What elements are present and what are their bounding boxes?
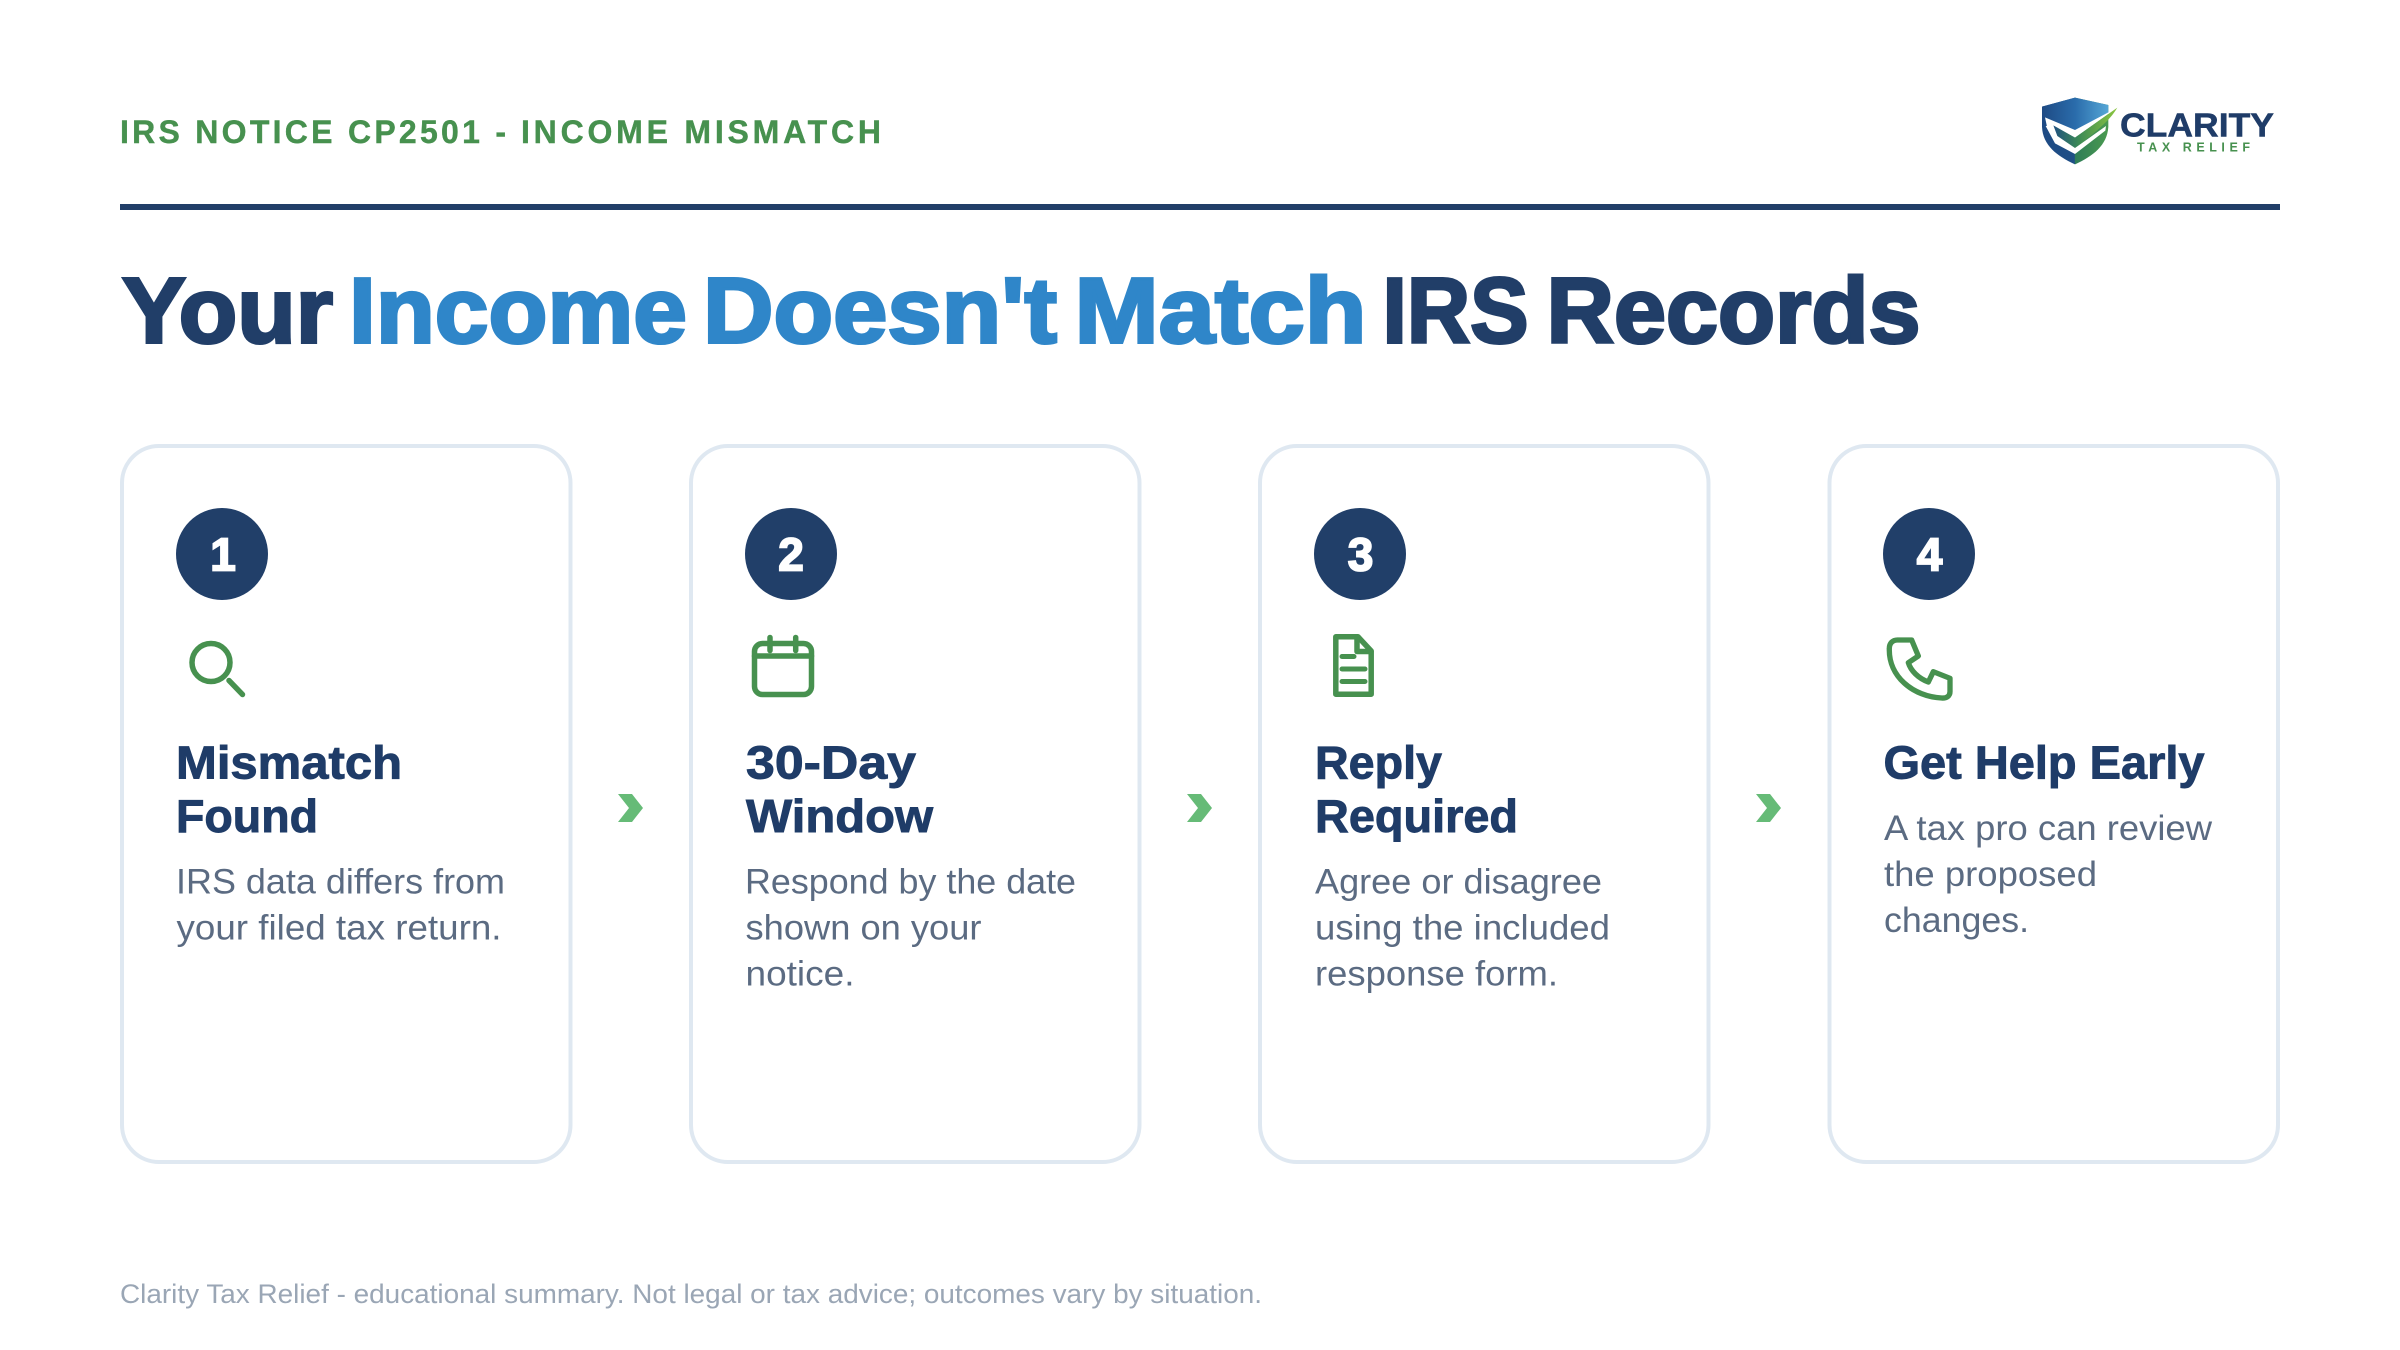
icon: magnifying glass (192, 644, 242, 694)
step 1 description (176, 862, 505, 948)
step 1 heading: Mismatch (176, 736, 402, 788)
step 4 description: the proposed (1884, 855, 2097, 894)
step number 1: 1 (210, 528, 236, 580)
icon: document (1336, 637, 1371, 694)
step 1 heading: Found (176, 790, 318, 842)
step 2 heading (746, 736, 933, 842)
eyebrow heading: IRS NOTICE CP2501 - (120, 114, 506, 150)
step 4 heading: Get Help Early (1884, 736, 2205, 788)
step 2 heading: 30-Day (746, 736, 916, 788)
title: Records (1546, 258, 1920, 362)
step number 4: 4 (1917, 528, 1943, 580)
step 3 heading: Reply (1315, 736, 1442, 788)
step 2 description: Respond by the date (745, 862, 1076, 902)
title: IRS (1382, 258, 1528, 362)
step 3 description: Agree or disagree (1315, 862, 1602, 902)
step number 2 (745, 508, 837, 600)
step number 2: 2 (778, 528, 804, 580)
icon: shield with check (2042, 98, 2117, 164)
step 2 description (745, 862, 1076, 994)
title (122, 258, 1920, 362)
step number 3: 3 (1348, 528, 1373, 580)
step 4 description: A tax pro can review (1884, 809, 2213, 848)
step 2 description: shown on your (746, 908, 982, 948)
footer disclaimer: Clarity Tax Relief - educational summary. Not legal or tax advice; outcomes vary by situation. (120, 1279, 1262, 1309)
step 3 heading (1315, 736, 1518, 842)
panel: step 4 get help early (1830, 446, 2278, 1162)
eyebrow heading (120, 114, 881, 150)
step 3 description (1315, 862, 1610, 994)
arrow 2 (1187, 794, 1212, 822)
arrow 1 (618, 794, 643, 822)
step 2 description: notice. (746, 954, 854, 994)
step number 4 (1883, 508, 1975, 600)
eyebrow heading: INCOME MISMATCH (521, 114, 881, 150)
icon: calendar (754, 638, 812, 694)
icon: phone (1889, 640, 1950, 698)
header rule (120, 204, 2280, 210)
step 3 description: response form. (1315, 954, 1558, 994)
step 3 heading: Required (1315, 790, 1518, 842)
step 2 heading: Window (746, 790, 933, 842)
step 1 heading (176, 736, 402, 842)
title: Match (1074, 258, 1366, 362)
logo: Clarity Tax Relief (2042, 98, 2274, 164)
step 1 description: IRS data differs from (176, 862, 505, 902)
panel: step 2 30-day window (691, 446, 1140, 1162)
logo tagline: TAX RELIEF (2137, 141, 2250, 155)
title: Income (349, 258, 687, 362)
step 3 description: using the included (1315, 908, 1610, 948)
arrow 3 (1756, 794, 1781, 822)
title: Doesn't (703, 258, 1057, 362)
step 1 description: your filed tax return. (176, 908, 502, 948)
logo wordmark: CLARITY (2120, 107, 2274, 144)
panel: step 1 mismatch found (122, 446, 570, 1162)
title: Your (122, 258, 333, 362)
step 4 description: changes. (1884, 901, 2029, 940)
step number 3 (1314, 508, 1406, 600)
panel: step 3 reply required (1260, 446, 1708, 1162)
step 4 description (1884, 809, 2213, 940)
step number 1 (176, 508, 268, 600)
